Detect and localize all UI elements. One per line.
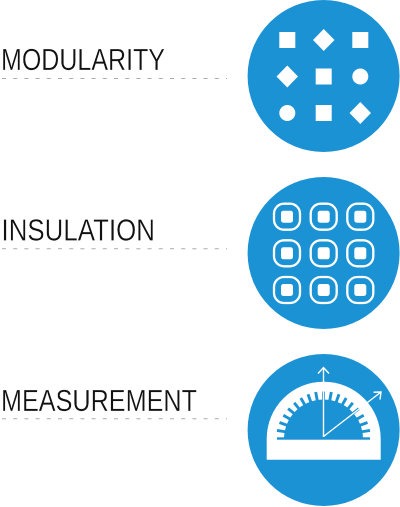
icon: measurement circle with protractor (248, 354, 400, 506)
heading: measurement: MEASUREMENT (1, 384, 197, 418)
heading: insulation: INSULATION (2, 214, 155, 248)
heading: modularity: MODULARITY (1, 43, 165, 77)
icon: insulation circle (248, 177, 400, 329)
icon: modularity circle (248, 0, 400, 152)
